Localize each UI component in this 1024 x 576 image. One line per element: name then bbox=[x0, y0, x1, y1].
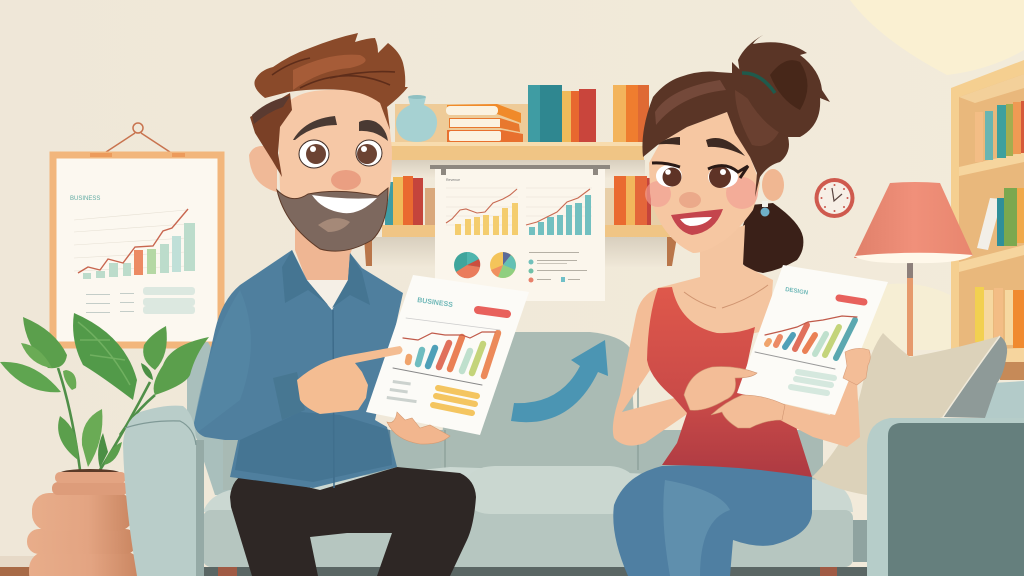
frame table rows bbox=[86, 287, 195, 314]
woman neck and chest bbox=[658, 225, 773, 340]
nose bbox=[331, 170, 361, 190]
armchair bbox=[867, 418, 1024, 576]
grey pillow bbox=[943, 336, 1024, 418]
lower shelf backing bbox=[425, 188, 666, 225]
leaves bbox=[0, 313, 167, 468]
man neck bbox=[295, 225, 360, 282]
man head bbox=[249, 33, 408, 251]
wall clock bbox=[814, 178, 854, 218]
poster rod bbox=[430, 165, 610, 175]
red label bbox=[478, 310, 507, 314]
right hand bbox=[711, 395, 785, 428]
bookcase books bbox=[975, 101, 1024, 348]
woman hands bbox=[684, 348, 870, 428]
woman left arm bbox=[613, 288, 690, 446]
document small table bbox=[387, 380, 417, 403]
shadows bbox=[235, 412, 392, 482]
frame bar chart bbox=[74, 209, 195, 279]
chart heading: BUSINESS bbox=[70, 196, 100, 202]
pie chart multicolor bbox=[490, 252, 516, 278]
document bar chart bbox=[755, 316, 857, 369]
right eye bbox=[708, 166, 748, 188]
blush bbox=[645, 177, 758, 209]
upper shelf backing bbox=[395, 104, 530, 142]
woman right arm bbox=[780, 350, 869, 447]
collars bbox=[282, 250, 328, 305]
document bar chart bbox=[393, 318, 500, 385]
hair bbox=[250, 33, 408, 177]
hanging wire bbox=[103, 123, 173, 154]
right eye bbox=[356, 140, 382, 166]
sofa back bbox=[187, 332, 823, 495]
yellow bar chart bbox=[446, 188, 518, 235]
beige pillow bbox=[812, 333, 1000, 495]
vase bbox=[396, 95, 437, 142]
nose bbox=[679, 192, 701, 208]
eyebrows bbox=[293, 116, 388, 141]
hair bun bbox=[738, 35, 830, 137]
pointing hand bbox=[297, 346, 402, 414]
woman bbox=[613, 35, 869, 576]
collar bone bbox=[684, 285, 768, 308]
left eye bbox=[652, 163, 682, 187]
document mint rows bbox=[791, 372, 834, 393]
book stack bbox=[446, 104, 523, 142]
framed wall chart bbox=[53, 123, 221, 345]
sofa bbox=[123, 332, 868, 576]
red label bbox=[839, 298, 864, 302]
center seat cushion bbox=[465, 466, 640, 514]
lower shelf boards and brackets bbox=[364, 225, 677, 266]
hair tie bbox=[742, 73, 775, 93]
smile bbox=[312, 195, 377, 213]
beard bbox=[277, 188, 388, 251]
floor shadow and legs bbox=[203, 567, 868, 576]
lower hand holding document bbox=[387, 412, 450, 444]
arrow: upward trend bbox=[511, 340, 608, 422]
right side pillows bbox=[812, 333, 1024, 495]
document title: BUSINESS bbox=[417, 297, 453, 309]
ear and earring bbox=[760, 169, 784, 216]
document yellow rows bbox=[433, 388, 477, 413]
eyebrows bbox=[655, 137, 745, 156]
plant in copper pot bbox=[0, 313, 167, 576]
hanging poster: charts bbox=[430, 165, 610, 301]
front plant leaf over sofa bbox=[154, 337, 209, 395]
wall shelves with books bbox=[364, 85, 677, 266]
placket bbox=[333, 310, 334, 488]
undershirt bbox=[307, 280, 348, 310]
jeans bbox=[613, 465, 812, 576]
teal bar chart bbox=[526, 188, 592, 235]
man shirt bbox=[194, 250, 403, 488]
ponytail bbox=[737, 203, 803, 273]
man trousers bbox=[230, 467, 476, 576]
bookcase boards bbox=[959, 152, 1024, 378]
copper pot bbox=[27, 469, 141, 576]
document title: DESIGN bbox=[785, 287, 808, 297]
sofa left arm bbox=[123, 406, 204, 576]
face bbox=[649, 112, 760, 253]
sleeve bbox=[194, 290, 251, 432]
fingers gripping document bbox=[843, 348, 870, 385]
face bbox=[278, 90, 392, 249]
mouth bbox=[671, 209, 723, 235]
sofa seat bbox=[203, 466, 867, 567]
upright books top shelf bbox=[528, 85, 649, 142]
floor lamp bbox=[854, 182, 973, 356]
poster heading: Revenue bbox=[446, 178, 460, 182]
poster legend bbox=[528, 252, 587, 282]
woman head bbox=[642, 35, 830, 253]
bookcase bbox=[951, 60, 1024, 380]
document held by woman bbox=[737, 265, 888, 415]
ear bbox=[249, 146, 277, 192]
hair bbox=[642, 62, 789, 197]
left eye bbox=[299, 140, 329, 168]
man bbox=[194, 33, 476, 576]
red top bbox=[647, 287, 812, 477]
left hand pointing bbox=[684, 367, 757, 410]
upright books lower shelf bbox=[385, 176, 651, 225]
upper shelf board bbox=[388, 142, 644, 160]
document held by man bbox=[366, 275, 529, 435]
stems bbox=[58, 368, 155, 470]
man hands bbox=[297, 346, 450, 444]
pie chart teal bbox=[454, 252, 480, 278]
